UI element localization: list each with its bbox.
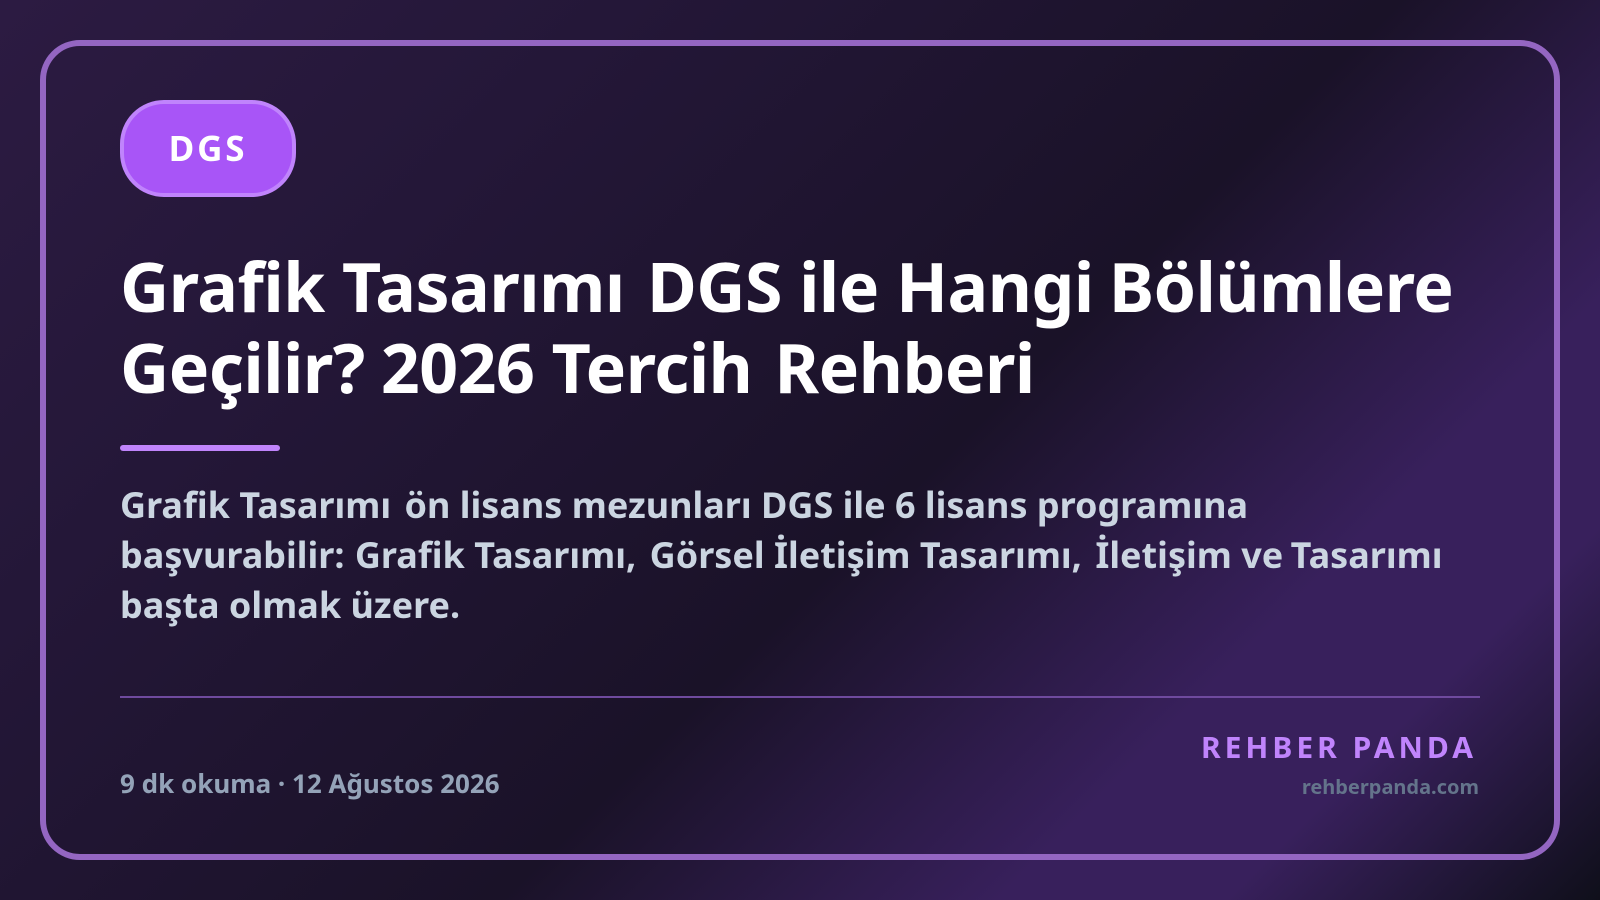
title: Bölümlere [1109, 239, 1453, 332]
description: Görsel İletişim Tasarımı, [650, 530, 1082, 579]
badge: DGS [120, 100, 296, 197]
brand name: REHBER PANDA [1201, 726, 1477, 767]
description: ön lisans mezunları DGS ile 6 lisans programına [405, 480, 1248, 529]
description: Grafik Tasarımı [120, 480, 391, 529]
description: başta olmak üzere. [120, 580, 460, 629]
website: rehberpanda.com [1302, 773, 1479, 800]
title: Grafik Tasarımı [120, 239, 625, 332]
divider [120, 696, 1480, 698]
title [120, 239, 1453, 413]
title: Geçilir? [120, 320, 365, 413]
description: Grafik Tasarımı, [355, 530, 636, 579]
title: Rehberi [775, 320, 1035, 413]
description [120, 480, 1442, 629]
badge: DGS: DGS [169, 125, 247, 172]
description: İletişim ve [1095, 530, 1283, 579]
title: 2026 Tercih [381, 320, 752, 413]
title: DGS ile Hangi [647, 239, 1094, 332]
reading time and date: 9 dk okuma · 12 Ağustos 2026 [120, 765, 500, 801]
description: başvurabilir: [120, 530, 344, 579]
accent bar [120, 445, 280, 451]
description: Tasarımı [1291, 530, 1442, 579]
